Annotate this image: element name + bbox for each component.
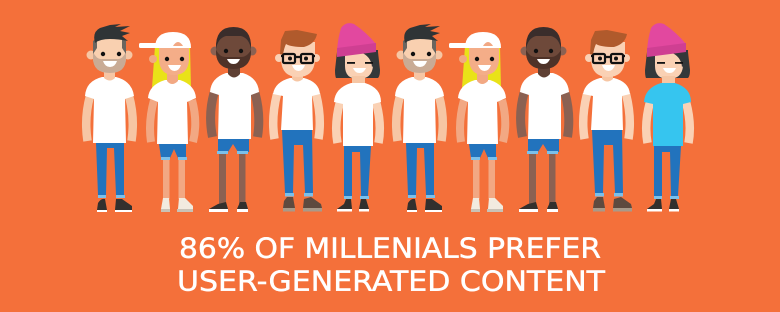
character: man with glasses (273, 30, 322, 212)
character: bearded man repeat (395, 24, 444, 212)
character: bearded man (85, 24, 134, 212)
headline (177, 232, 606, 298)
character: woman in pink beanie (334, 23, 381, 211)
character: man with glasses repeat (583, 30, 632, 212)
character: woman in pink beanie with blue shirt (644, 23, 691, 211)
headline: USER-GENERATED CONTENT (177, 264, 606, 298)
character: blonde woman in cap (139, 32, 196, 212)
character: dark-skinned man repeat (519, 27, 569, 212)
character: blonde woman in cap repeat (449, 32, 506, 212)
headline: 86% OF MILLENIALS PREFER (179, 232, 601, 264)
character: dark-skinned man (209, 27, 259, 212)
